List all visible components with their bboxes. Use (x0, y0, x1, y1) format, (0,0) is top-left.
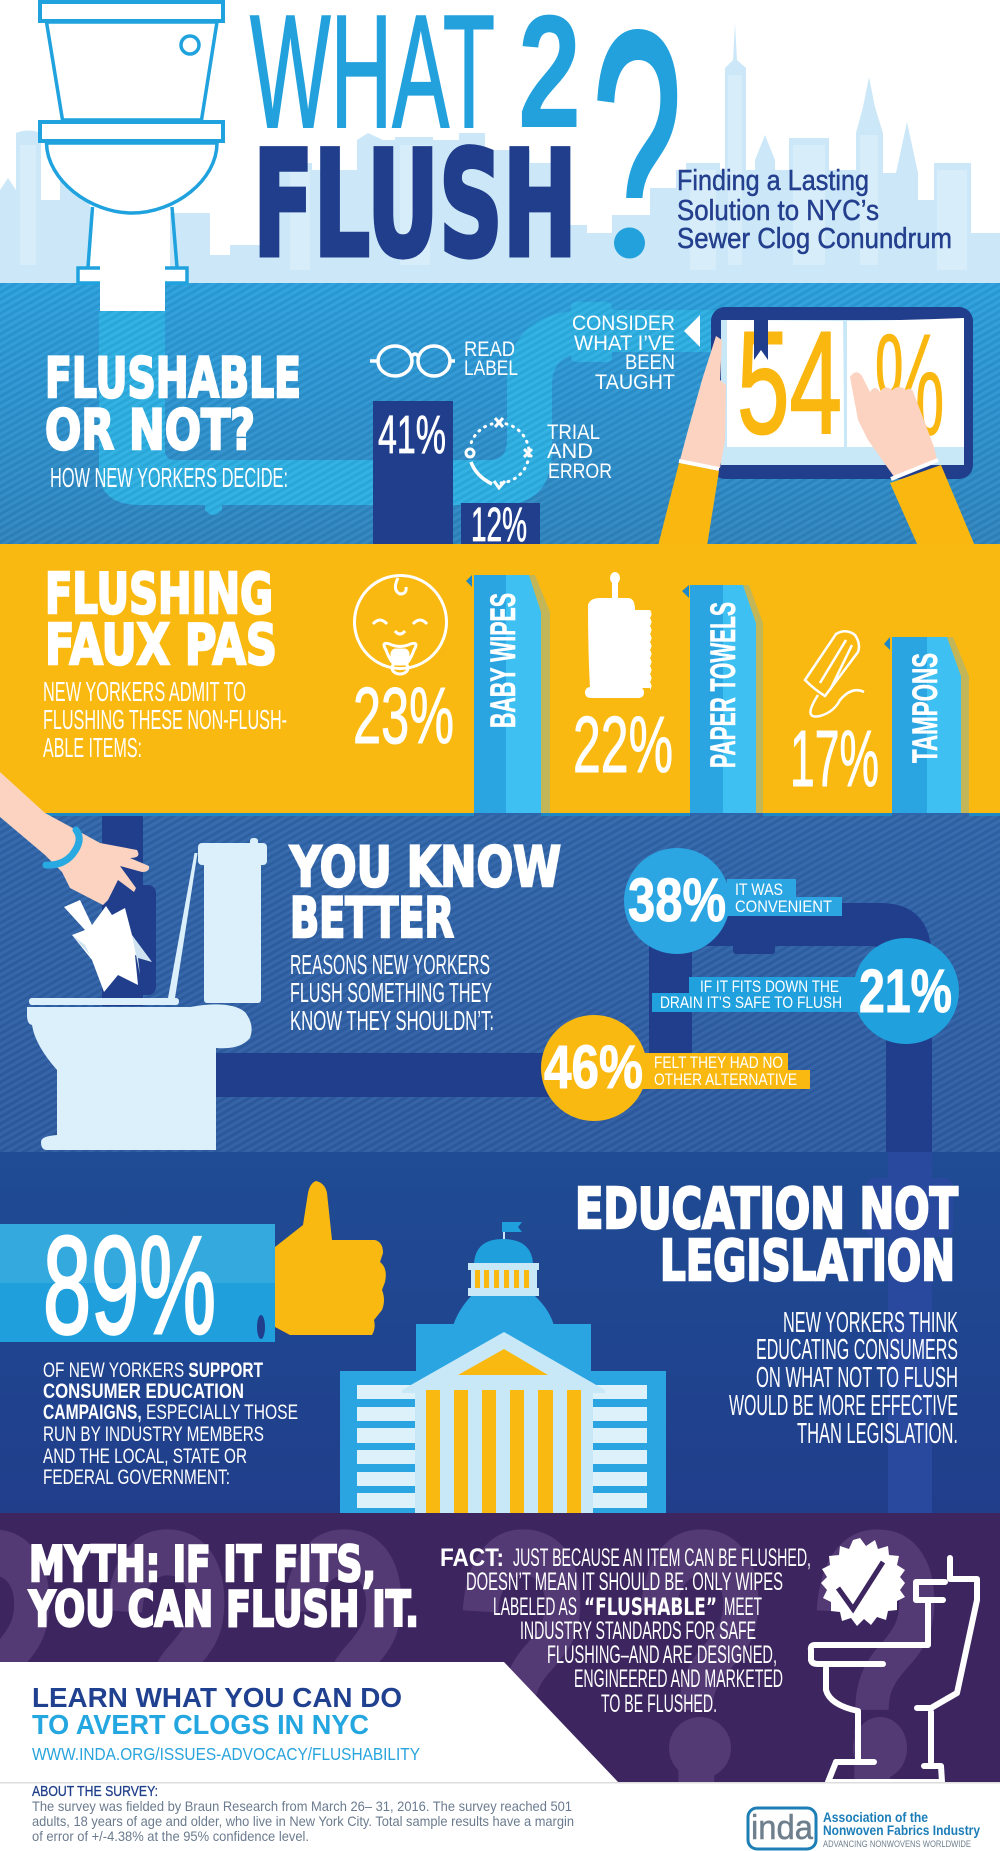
bar: 41% (373, 401, 453, 545)
panel: learn what you can do: WWW.INDA.ORG/ISSUES-ADVOCACY/FLUSHABILITY (32, 1744, 420, 1764)
callout: 21% fits down the drain: 21% (859, 957, 952, 1025)
icon: baby face (354, 576, 446, 674)
navy pipes (102, 816, 932, 1153)
text: about the survey: The survey was fielded by Braun Research from March 26– 31, 2016. The survey reached 501 (32, 1798, 572, 1814)
icon: tampon (805, 631, 864, 717)
heading: flushing faux pas: FLUSHING THESE NON-FLUSH- (43, 704, 287, 735)
tablet with 54% (711, 301, 973, 479)
icon: hand with bracelet (0, 772, 149, 905)
callout: 21% fits down the drain (652, 938, 959, 1044)
heading: flushable or not: HOW NEW YORKERS DECIDE: (50, 462, 288, 493)
text: support consumer education: AND THE LOCAL, STATE OR (43, 1445, 247, 1468)
heading: you know better: BETTER (290, 886, 454, 950)
background question marks: ? (99, 1461, 235, 1851)
label: read label (464, 338, 518, 380)
ribbon: paper towels: PAPER TOWELS (704, 602, 743, 768)
subtitle: Sewer Clog Conundrum (677, 223, 952, 255)
heading: flushing faux pas: NEW YORKERS ADMIT TO (43, 676, 246, 707)
text: new yorkers think (729, 1307, 958, 1450)
icon: left hand and sleeve (658, 336, 726, 546)
heading: education not legislation (575, 1177, 958, 1294)
panel: learn what you can do: LEARN WHAT YOU CAN DO (32, 1682, 402, 1713)
text: support consumer education: OF NEW YORKERS SUPPORT (43, 1359, 263, 1382)
lighter pipe (866, 1152, 953, 1514)
heading: flushing faux pas: ABLE ITEMS: (43, 732, 142, 763)
callout: 46% no other alternative: 46% (544, 1033, 643, 1101)
heading: flushable or not: OR NOT? (45, 398, 255, 462)
subtitle: Finding a Lasting (677, 165, 869, 197)
text: support consumer education: CAMPAIGNS, ESPECIALLY THOSE (43, 1401, 298, 1424)
text: about the survey: ABOUT THE SURVEY: (32, 1783, 158, 1800)
section: flushable or not band (0, 283, 1000, 545)
stat: 22% paper towels: 22% (573, 700, 673, 789)
bar: 12%: 12% (471, 499, 527, 552)
light blue pipes (99, 302, 730, 515)
text: about the survey (32, 1783, 574, 1844)
icon: toilet outline (40, 2, 223, 311)
icon: trial and error cycle (466, 418, 532, 488)
text: fact: ENGINEERED AND MARKETED (574, 1665, 783, 1693)
ribbon: baby wipes (466, 575, 550, 815)
heading: flushable or not: FLUSHABLE (45, 346, 301, 410)
tablet with 54%: % (874, 303, 945, 466)
ribbon: baby wipes: BABY WIPES (484, 593, 523, 728)
section: education not legislation band (0, 1152, 1000, 1514)
header background (0, 0, 1000, 284)
text: fact: DOESN’T MEAN IT SHOULD BE. ONLY WIPES (466, 1568, 783, 1596)
text: support consumer education: RUN BY INDUSTRY MEMBERS (43, 1423, 264, 1446)
label: consider what I've been taught: CONSIDER (572, 312, 675, 335)
label: trial and error: AND (547, 440, 593, 463)
divider (0, 1782, 1000, 1784)
text: fact: TO BE FLUSHED. (601, 1690, 717, 1718)
title (250, 14, 678, 260)
label: read label: LABEL (464, 357, 518, 380)
skyline windows (20, 75, 967, 270)
icon: capitol building (340, 1222, 666, 1516)
stat: 17% tampons: 17% (790, 714, 879, 803)
label: trial and error: TRIAL (547, 421, 600, 444)
background question marks: ? (633, 1461, 769, 1851)
bar: 41%: 41% (378, 405, 446, 465)
callout: 46% no other alternative: FELT THEY HAD NO (654, 1053, 783, 1072)
text: fact (440, 1544, 811, 1718)
callout: 38% it was convenient: IT WAS (735, 880, 783, 899)
icon: right hand and sleeve (850, 372, 975, 546)
section: myth band (0, 1513, 1000, 1783)
subtitle (677, 165, 952, 255)
heading: myth (28, 1536, 419, 1638)
text: about the survey: adults, 18 years of age and older, who live in New York City. Total sample results have a margin (32, 1813, 574, 1829)
text: fact: FLUSHING–AND ARE DESIGNED, (547, 1641, 777, 1669)
ribbon: paper towels (682, 585, 763, 815)
icon: thumbs up (275, 1181, 386, 1335)
text: fact: MEET (724, 1593, 762, 1621)
callout: 38% it was convenient: 38% (628, 866, 726, 934)
icon: paper towel roll (585, 572, 652, 698)
label: consider what I've been taught: WHAT I’VE (574, 332, 675, 355)
callout: 46% no other alternative: OTHER ALTERNATIVE (654, 1070, 797, 1089)
label: trial and error: ERROR (548, 460, 612, 483)
heading: flushing faux pas: FAUX PAS (45, 613, 277, 678)
heading: myth: MYTH: IF IT FITS, (29, 1536, 376, 1593)
text: fact: LABELED AS (493, 1593, 577, 1621)
callout: 38% it was convenient: CONVENIENT (735, 897, 832, 916)
panel: learn what you can do (0, 1662, 619, 1783)
background question marks (0, 1530, 934, 1782)
heading: flushable or not (45, 346, 301, 493)
heading: you know better: YOU KNOW (289, 835, 561, 899)
text: support consumer education: FEDERAL GOVERNMENT: (43, 1466, 230, 1489)
label: consider what I've been taught (572, 312, 675, 394)
icon: toilet silhouette (27, 838, 267, 1150)
label: read label: READ (464, 338, 515, 361)
logo: inda: Association of the (823, 1809, 928, 1825)
section: flushing faux pas band (0, 544, 1000, 814)
heading: you know better: FLUSH SOMETHING THEY (290, 977, 492, 1008)
stat: 23% baby wipes: 23% (353, 671, 454, 760)
panel: learn what you can do: TO AVERT CLOGS IN NYC (32, 1709, 369, 1740)
ribbon: tampons (884, 637, 969, 815)
heading: myth: YOU CAN FLUSH IT. (28, 1581, 419, 1638)
callout: 21% fits down the drain: IF IT FITS DOWN THE (700, 977, 839, 996)
tablet with 54%: 54 (737, 301, 842, 464)
label: consider what I've been taught: TAUGHT (595, 371, 675, 394)
text: fact: INDUSTRY STANDARDS FOR SAFE (520, 1617, 756, 1645)
text: support consumer education (43, 1359, 298, 1489)
title: FLUSH (253, 120, 577, 290)
bar: 12% (461, 499, 540, 552)
heading: flushing faux pas: FLUSHING (45, 562, 273, 627)
subtitle: Solution to NYC’s (677, 195, 879, 227)
section: you know better band (0, 813, 1000, 1153)
text: about the survey: of error of +/-4.38% at the 95% confidence level. (32, 1828, 309, 1844)
callout: 46% no other alternative (541, 1015, 810, 1121)
heading: you know better (289, 835, 561, 1036)
heading: flushing faux pas (43, 562, 287, 763)
text: fact: FACT: (440, 1544, 504, 1572)
arrow (684, 315, 700, 347)
icon: crumpled paper (64, 900, 152, 992)
logo: inda (748, 1808, 980, 1850)
ribbon: tampons: TAMPONS (906, 653, 945, 763)
heading: you know better: REASONS NEW YORKERS (290, 949, 490, 980)
heading: you know better: KNOW THEY SHOULDN’T: (290, 1005, 494, 1036)
label: trial and error (547, 421, 612, 483)
callout: 21% fits down the drain: DRAIN IT’S SAFE TO FLUSH (660, 993, 842, 1012)
background question marks: ? (455, 1461, 591, 1851)
ribbon: 89%: 89% (43, 1208, 216, 1363)
background question marks: ? (276, 1461, 412, 1851)
icon: seal with check (821, 1538, 905, 1626)
label: consider what I've been taught: BEEN (625, 351, 675, 374)
icon: glasses (370, 346, 455, 376)
text: fact: “FLUSHABLE” (584, 1593, 717, 1621)
logo: inda: inda (751, 1809, 813, 1847)
callout: 38% it was convenient (624, 848, 842, 954)
city skyline (0, 23, 1000, 284)
icon: toilet outline white (811, 1558, 977, 1782)
text: support consumer education: CONSUMER EDUCATION (43, 1380, 244, 1403)
